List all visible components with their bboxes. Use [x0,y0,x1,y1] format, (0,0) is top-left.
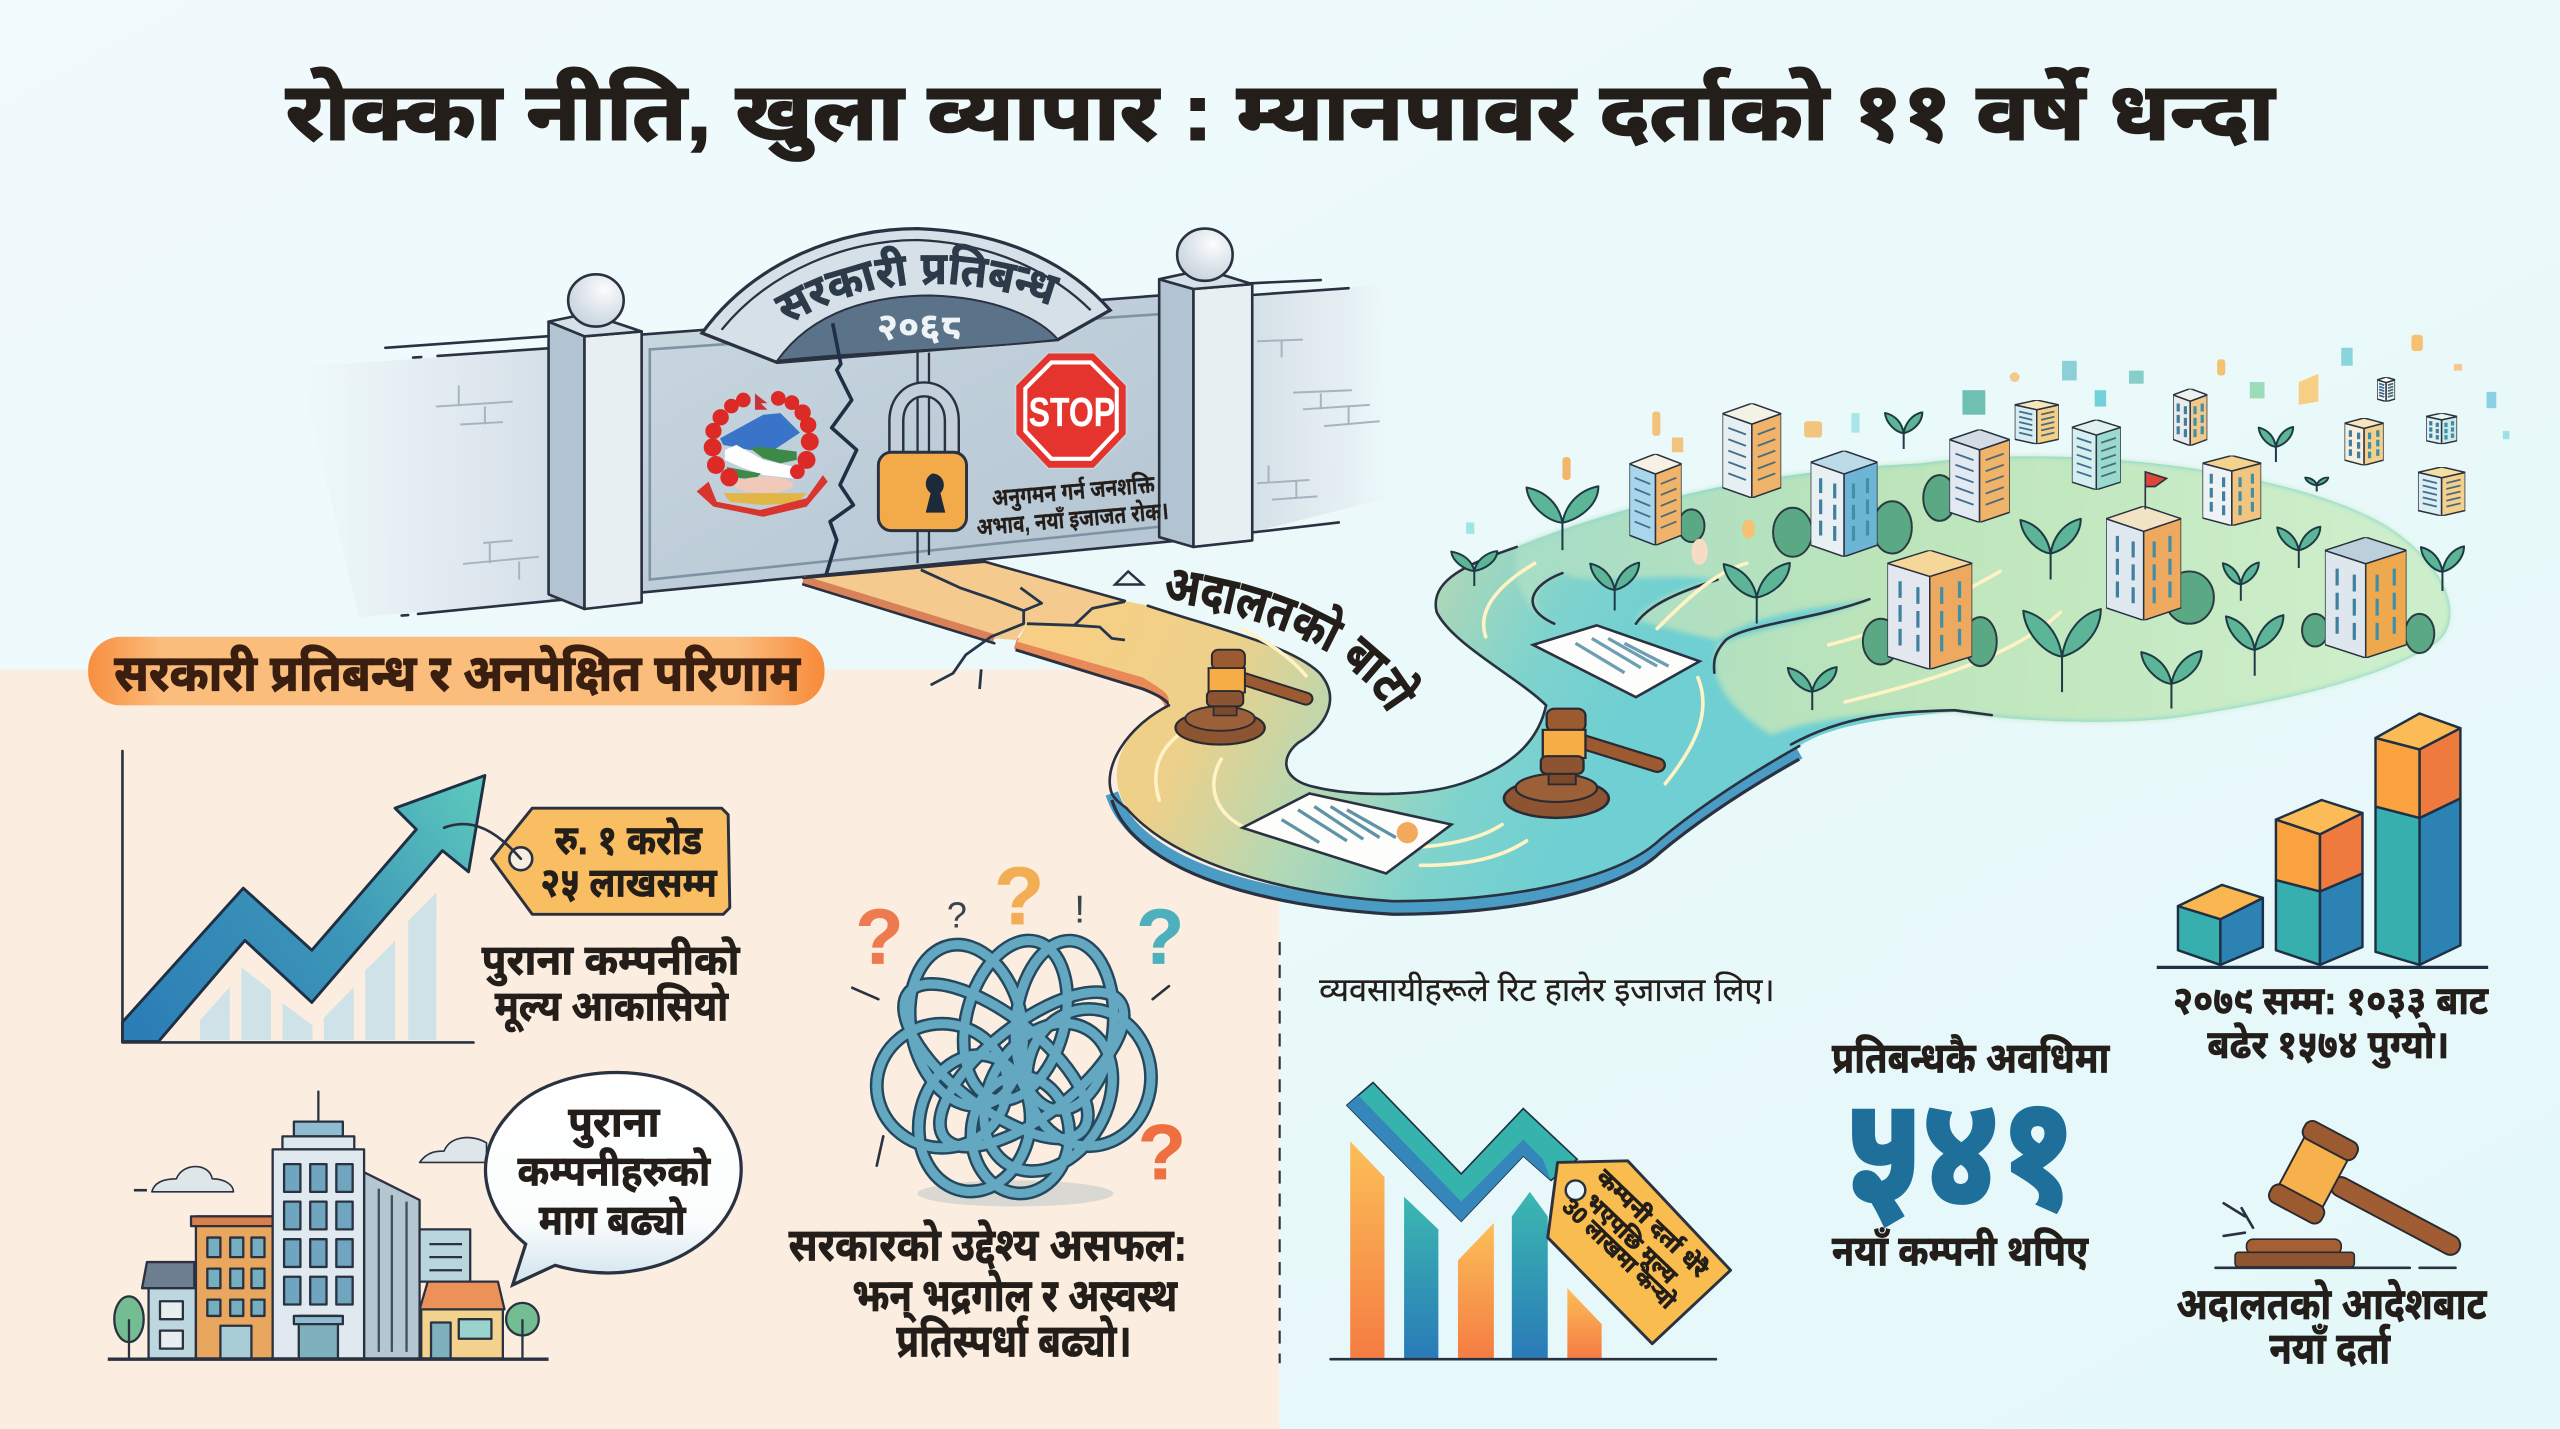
stat: 541 new companies: प्रतिबन्धकै अवधिमा [1832,1034,2111,1082]
icon: stop sign: STOP [1029,389,1115,435]
wall left [299,348,567,617]
icon: national emblem [697,391,828,517]
caption: growth 1033 to 1574 [2173,980,2489,1069]
illustration: tangled knot with question marks: ! [1074,888,1085,931]
icon: judge gavel [2216,1118,2481,1290]
flag [2145,472,2167,509]
gate notice text: अभाव, नयाँ इजाजत रोक। [975,497,1170,542]
speech bubble: demand grew: माग बढ्यो [539,1195,687,1243]
confetti [1466,335,2509,565]
illustration: city buildings [108,1091,549,1359]
chart: rising company value [122,751,485,1042]
panel heading text: सरकारी प्रतिबन्ध र अनपेक्षित परिणाम [114,644,801,702]
caption: new registration from court order: अदालतको आदेशबाट [2176,1278,2488,1329]
price tag: 30 lakh [1548,1161,1731,1344]
gate notice text [973,469,1170,542]
isometric buildings [1629,377,2465,669]
caption: government objective failed [789,1217,1187,1367]
illustration: tangled knot with question marks: ? [1138,1108,1186,1196]
caption: new registration from court order [2176,1278,2488,1373]
road side band blue [1112,753,1799,908]
gate panel [640,294,1180,593]
year dome [777,296,1058,361]
illustration: tangled knot with question marks: ? [994,851,1044,942]
road surface [1017,456,2450,901]
caption: growth 1033 to 1574: २०७९ सम्म: १०३३ बाट [2173,980,2489,1023]
gate slab [803,562,1125,640]
illustration: tangled knot with question marks [852,851,1186,1207]
caption: government objective failed: झन् भद्रगोल र अस्वस्थ [852,1269,1178,1323]
gate notice text: अनुगमन गर्न जनशक्ति [991,470,1157,513]
chart: falling value with price tag [1331,1082,1731,1359]
caption: old company value [482,936,741,1032]
gavel on road [1176,650,1306,745]
speech bubble: demand grew [485,1072,741,1285]
illustration: tangled knot with question marks: ? [947,894,967,935]
price tag: 1 crore 25 lakh: रु. १ करोड [555,817,703,863]
road cracks [921,570,1125,689]
icon: stop sign [1016,353,1127,469]
bushes [1678,475,2434,666]
road label: अदालतको बाटो [1166,570,1421,712]
divider: dashed vertical [1279,942,1281,1363]
writ sentence: व्यवसायीहरूले रिट हालेर इजाजत लिए। [1319,971,1775,1008]
stat: 541 new companies [1832,1034,2111,1274]
chart: 3D stacked bars growth [2157,713,2488,967]
road edges [1148,547,1546,794]
caption: growth 1033 to 1574: बढेर १५७४ पुग्यो। [2207,1023,2449,1069]
triangle pebble [1115,571,1143,584]
price tag: 1 crore 25 lakh [444,808,730,914]
price tag: 30 lakh: 30 लाखमा कऱ्यो [1557,1193,1682,1315]
speech bubble: demand grew: कम्पनीहरुको [518,1146,712,1194]
illustration: court road into green land [802,454,2453,916]
right pillar [1159,229,1252,547]
panel: peach consequences background [0,669,1279,1429]
road lines [1156,563,2060,865]
seedlings [1451,412,2464,710]
crack [826,323,857,575]
caption: government objective failed: प्रतिस्पर्धा बढ्यो। [896,1315,1131,1367]
illustration: government gate [382,227,1380,617]
green land [1515,456,2450,735]
caption: new registration from court order: नयाँ दर्ता [2269,1322,2391,1373]
stat: 541 new companies: नयाँ कम्पनी थपिए [1832,1226,2089,1274]
caption: old company value: पुराना कम्पनीको [482,936,741,986]
stat: 541 new companies: ५४१ [1845,1066,2077,1238]
illustration: tangled knot with question marks: ? [856,892,903,980]
caption: government objective failed: सरकारको उद्देश्य असफल: [789,1217,1187,1270]
left pillar [549,274,642,609]
caption: old company value: मूल्य आकासियो [495,981,729,1032]
document two [1533,625,1700,697]
speech bubble: demand grew: पुराना [568,1098,661,1147]
price tag: 30 lakh: कम्पनी दर्ता धेरै [1592,1164,1714,1283]
gavel on water [1504,709,1657,818]
wall right [1252,284,1388,532]
icon: padlock [878,389,967,531]
arch title: सरकारी प्रतिबन्ध [773,244,1061,320]
price tag: 1 crore 25 lakh: २५ लाखसम्म [540,859,718,905]
arch [702,229,1110,362]
price tag: 30 lakh: भएपछि मूल्य [1579,1188,1683,1290]
road side band orange [1016,643,1171,709]
road outer curve left [1110,705,1799,901]
document one [1242,793,1451,873]
panel heading pill [88,637,824,705]
title: रोक्का नीति, खुला व्यापार : म्यानपावर दर्ताको ११ वर्षे धन्दा [286,68,2276,162]
illustration: tangled knot with question marks: ? [1136,892,1184,980]
year: २०६८ [877,306,962,348]
